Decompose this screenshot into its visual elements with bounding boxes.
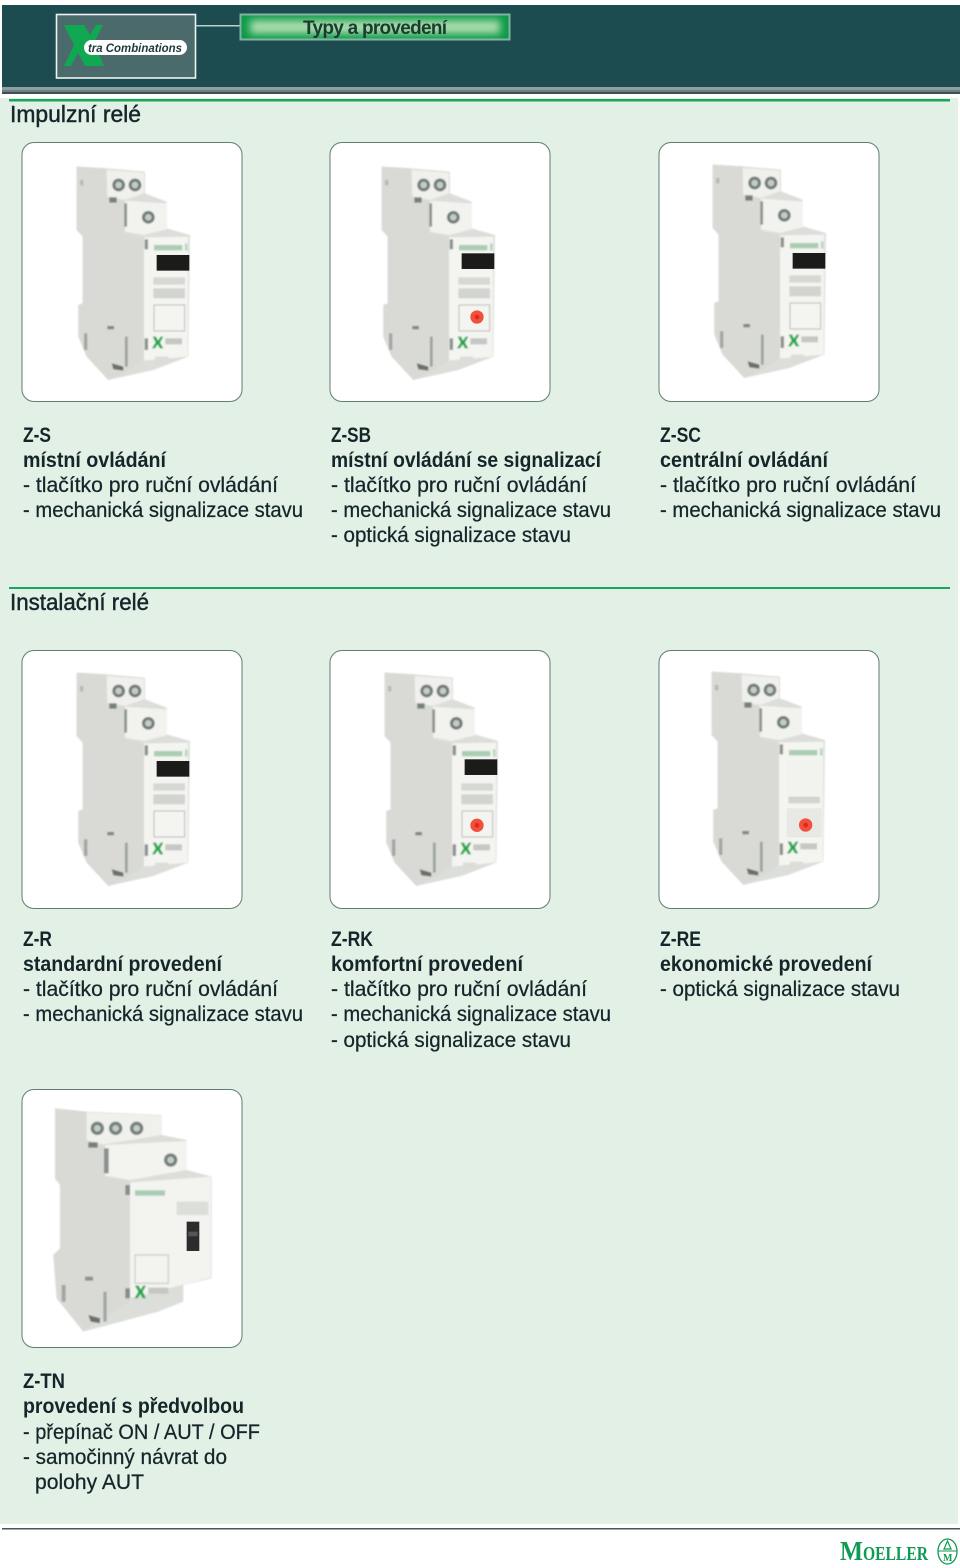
panel: Z-R: [22, 650, 303, 1026]
panel: Z-TN: - přepínač ON / AUT / OFF: [23, 1421, 260, 1444]
panel: Z-RK: - mechanická signalizace stavu: [331, 1003, 611, 1026]
panel: Z-S: [22, 142, 303, 522]
panel: Z-R: Z-R: [23, 928, 52, 951]
panel: Z-RK: [330, 650, 611, 1052]
heading: Impulzní relé: Impulzní relé: [10, 101, 141, 127]
panel: Z-R: standardní provedení: [23, 953, 223, 976]
panel: Z-R: - mechanická signalizace stavu: [23, 1003, 303, 1026]
panel: Z-SC: [659, 142, 941, 522]
panel: Z-SC: Z-SC: [660, 424, 701, 447]
logo: Moeller: [840, 1536, 957, 1566]
panel: Z-SC: - tlačítko pro ruční ovládání: [660, 474, 916, 497]
panel: Z-SB: - mechanická signalizace stavu: [331, 499, 611, 522]
panel: Z-SC: - mechanická signalizace stavu: [660, 499, 941, 522]
panel: Z-TN: Z-TN: [23, 1370, 65, 1393]
panel: Z-RE: Z-RE: [660, 928, 701, 951]
panel: Z-R: - tlačítko pro ruční ovládání: [23, 978, 278, 1001]
panel: Z-RE: ekonomické provedení: [660, 953, 873, 976]
title bar: [240, 14, 510, 40]
panel: Z-SC: centrální ovládání: [660, 449, 829, 472]
title bar: Typy a provedení: [303, 18, 448, 39]
panel: Z-TN: [22, 1090, 260, 1494]
panel: Z-SB: - tlačítko pro ruční ovládání: [331, 474, 587, 497]
logo: Xtra Combinations: [56, 14, 196, 78]
panel: Z-RK: Z-RK: [331, 928, 373, 951]
footer rule: [2, 1528, 960, 1530]
panel: Z-RK: komfortní provedení: [331, 953, 524, 976]
heading: Instalační relé: Instalační relé: [10, 589, 149, 615]
panel: Z-RK: - optická signalizace stavu: [331, 1029, 571, 1052]
device photo: Z-TN: [53, 1108, 212, 1332]
panel: Z-SB: Z-SB: [331, 424, 371, 447]
panel: Z-RE: - optická signalizace stavu: [660, 978, 900, 1001]
panel: Z-SB: - optická signalizace stavu: [331, 524, 571, 547]
header band: [2, 5, 960, 94]
panel: Z-RK: - tlačítko pro ruční ovládání: [331, 978, 587, 1001]
panel: Z-S: - tlačítko pro ruční ovládání: [23, 474, 278, 497]
logo: Moeller: M: [943, 1553, 953, 1564]
panel: Z-TN: polohy AUT: [35, 1471, 144, 1494]
panel: Z-S: Z-S: [23, 424, 51, 447]
panel: Z-SB: [330, 142, 611, 547]
panel: Z-TN: - samočinný návrat do: [23, 1446, 227, 1469]
logo: Moeller: M: [840, 1536, 863, 1566]
logo: Xtra Combinations: tra Combinations: [88, 41, 182, 55]
panel: Z-TN: provedení s předvolbou: [23, 1395, 244, 1418]
panel: Z-S: místní ovládání: [23, 449, 167, 472]
logo: Moeller: OELLER: [863, 1543, 928, 1565]
panel: Z-SB: místní ovládání se signalizací: [331, 449, 602, 472]
panel: Z-S: - mechanická signalizace stavu: [23, 499, 303, 522]
panel: Z-RE: [659, 650, 900, 1001]
connector line: [196, 25, 240, 26]
